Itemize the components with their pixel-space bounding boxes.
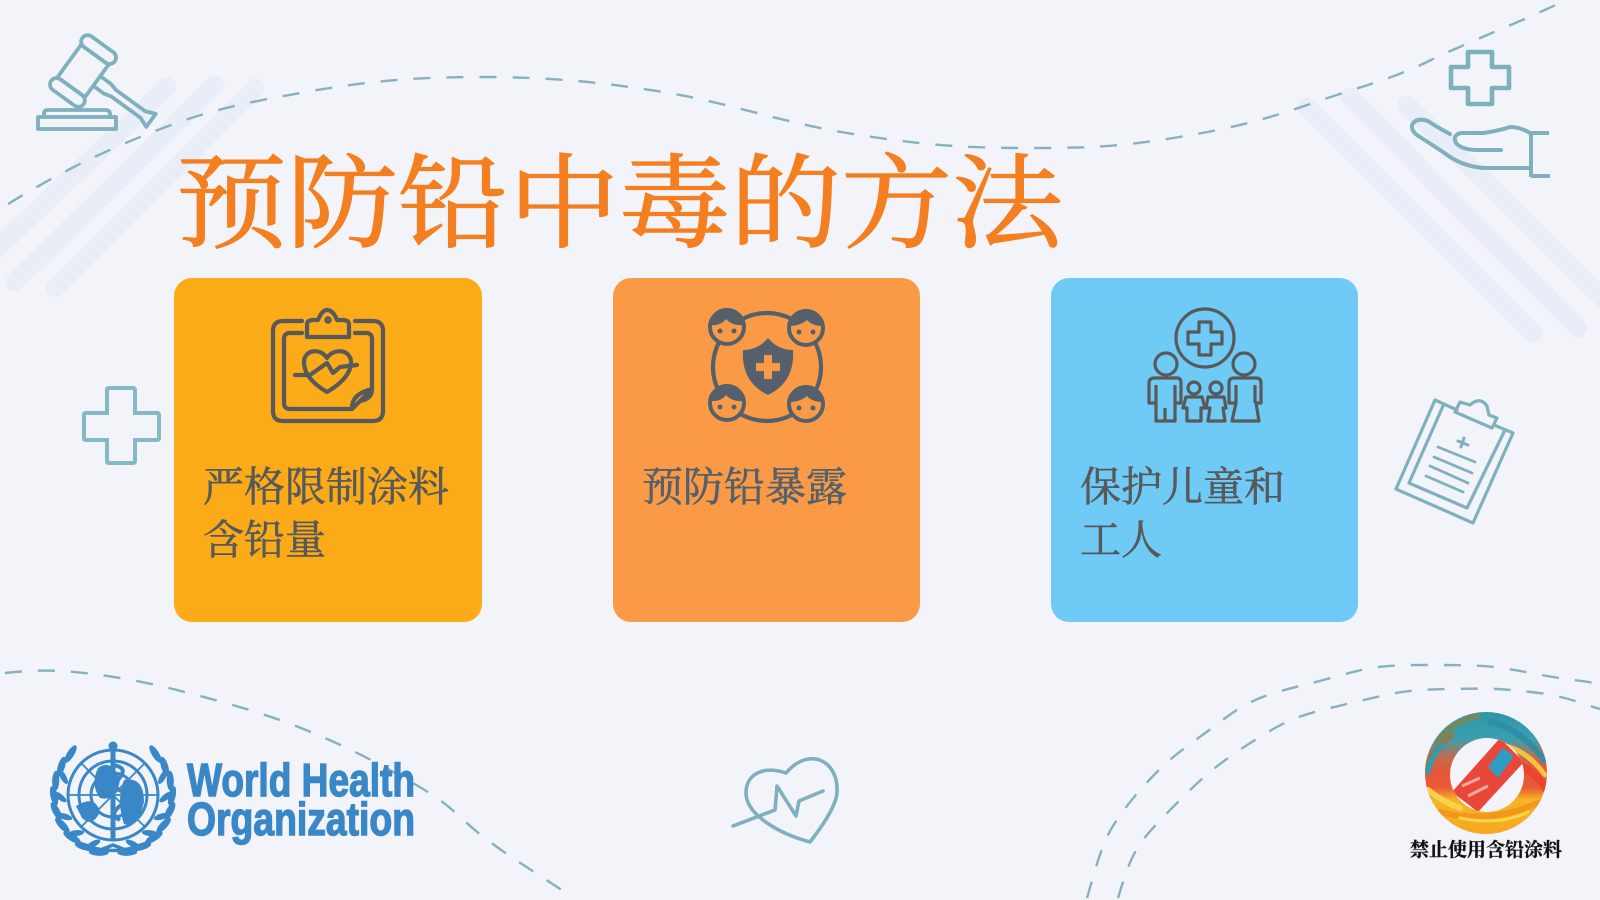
icon: cross and caring hand [1412,52,1550,177]
panel: limit lead in paint [174,278,482,622]
text: protect children and workers: 保护儿童和 [1080,464,1285,510]
icon: family with medical cross [1149,309,1261,421]
icon: clipboard [1396,400,1513,523]
emblem [48,742,178,856]
text: limit lead in paint: 严格限制涂料 [203,464,449,510]
icon: clipboard with heart [273,310,383,421]
icon: gavel [38,33,170,147]
caption: 禁止使用含铅涂料 [1410,839,1562,861]
logo: World Health Organization [48,742,415,856]
text: limit lead in paint: 含铅量 [203,517,326,563]
icon: medical cross left [84,388,159,463]
panel: protect children and workers [1051,278,1358,622]
panel: prevent lead exposure [613,278,920,622]
text: protect children and workers: 工人 [1080,517,1162,563]
icon: heart with pulse [733,759,837,842]
text: prevent lead exposure: 预防铅暴露 [642,464,847,510]
logo: ban lead paint [1410,712,1562,861]
paint ring [1425,712,1547,834]
wordmark: Organization [187,793,415,845]
icon: shield and people [710,308,823,421]
wordmark: World Health [187,754,415,806]
title: 预防铅中毒的方法 [176,149,1064,262]
